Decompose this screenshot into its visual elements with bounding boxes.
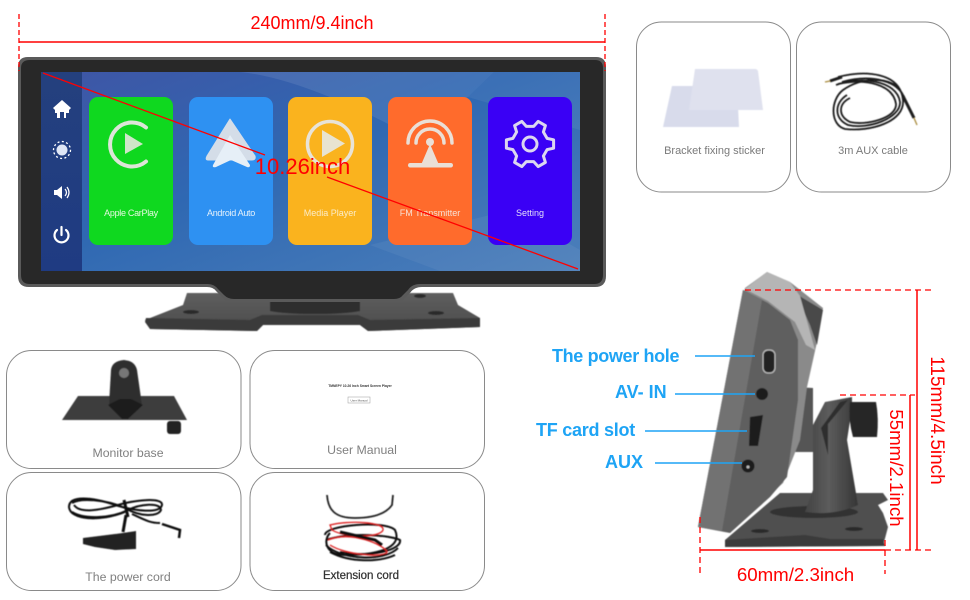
panel: user manual: User Manual [350,398,368,402]
panel: the power cord: The power cord [85,570,171,584]
app tile: Apple CarPlay [89,97,173,245]
monitor body [18,57,606,302]
panel: user manual: User Manual [327,443,397,457]
app tile: Android Auto: Android Auto [207,208,255,218]
dimension: total height [745,290,947,550]
dimension: screen width [19,13,605,71]
mounting plate [725,493,888,547]
device shell [698,272,823,532]
callout: AUX: AUX [605,452,643,472]
app tile: Setting: Setting [516,208,544,218]
monitor stand base [145,293,480,331]
dimension: screen width: 240mm/9.4inch [250,13,374,33]
sidebar icons [53,100,71,242]
app tile: FM Transmitter [388,97,472,245]
app tile: FM Transmitter: FM Transmitter [400,208,460,218]
callout: The power hole: The power hole [552,346,679,366]
panel: monitor base [6,350,241,468]
side view of device [698,272,888,547]
panel: monitor base: Monitor base [92,446,164,460]
panel: the power cord [6,472,241,590]
screen [41,72,580,271]
dimension: screen diagonal: 10.26inch [255,154,350,179]
panel: 3m AUX cable [796,22,950,192]
dimension: depth [700,517,885,585]
panel: bracket fixing sticker [636,22,790,192]
dimension: total height: 115mm/4.5inch [926,356,947,485]
app tile: Setting [488,97,572,245]
panel: extension cord [250,472,484,590]
panel: 3m AUX cable: 3m AUX cable [838,145,908,157]
dimension: depth: 60mm/2.3inch [737,564,854,585]
panel: bracket fixing sticker: Bracket fixing sticker [664,145,765,157]
app tile: Apple CarPlay: Apple CarPlay [104,208,159,218]
app tile: Android Auto [189,97,273,245]
app tile: Media Player: Media Player [304,208,356,218]
ports [763,350,775,373]
callout: TF card slot: TF card slot [536,420,635,440]
stand post [795,387,813,452]
callout: AV-IN [615,382,755,402]
dimension: stand height: 55mm/2.1inch [886,409,907,527]
panel: extension cord: Extension cord [323,570,399,582]
dimension: screen diagonal [43,73,578,269]
panel: user manual: TMNEPY 10.26 Inch Smart Screen Player [328,384,392,388]
app tile: Media Player [288,97,372,245]
callout: AV-IN: AV- IN [615,382,667,402]
callout: AUX [605,452,742,472]
panel: user manual [250,350,484,468]
